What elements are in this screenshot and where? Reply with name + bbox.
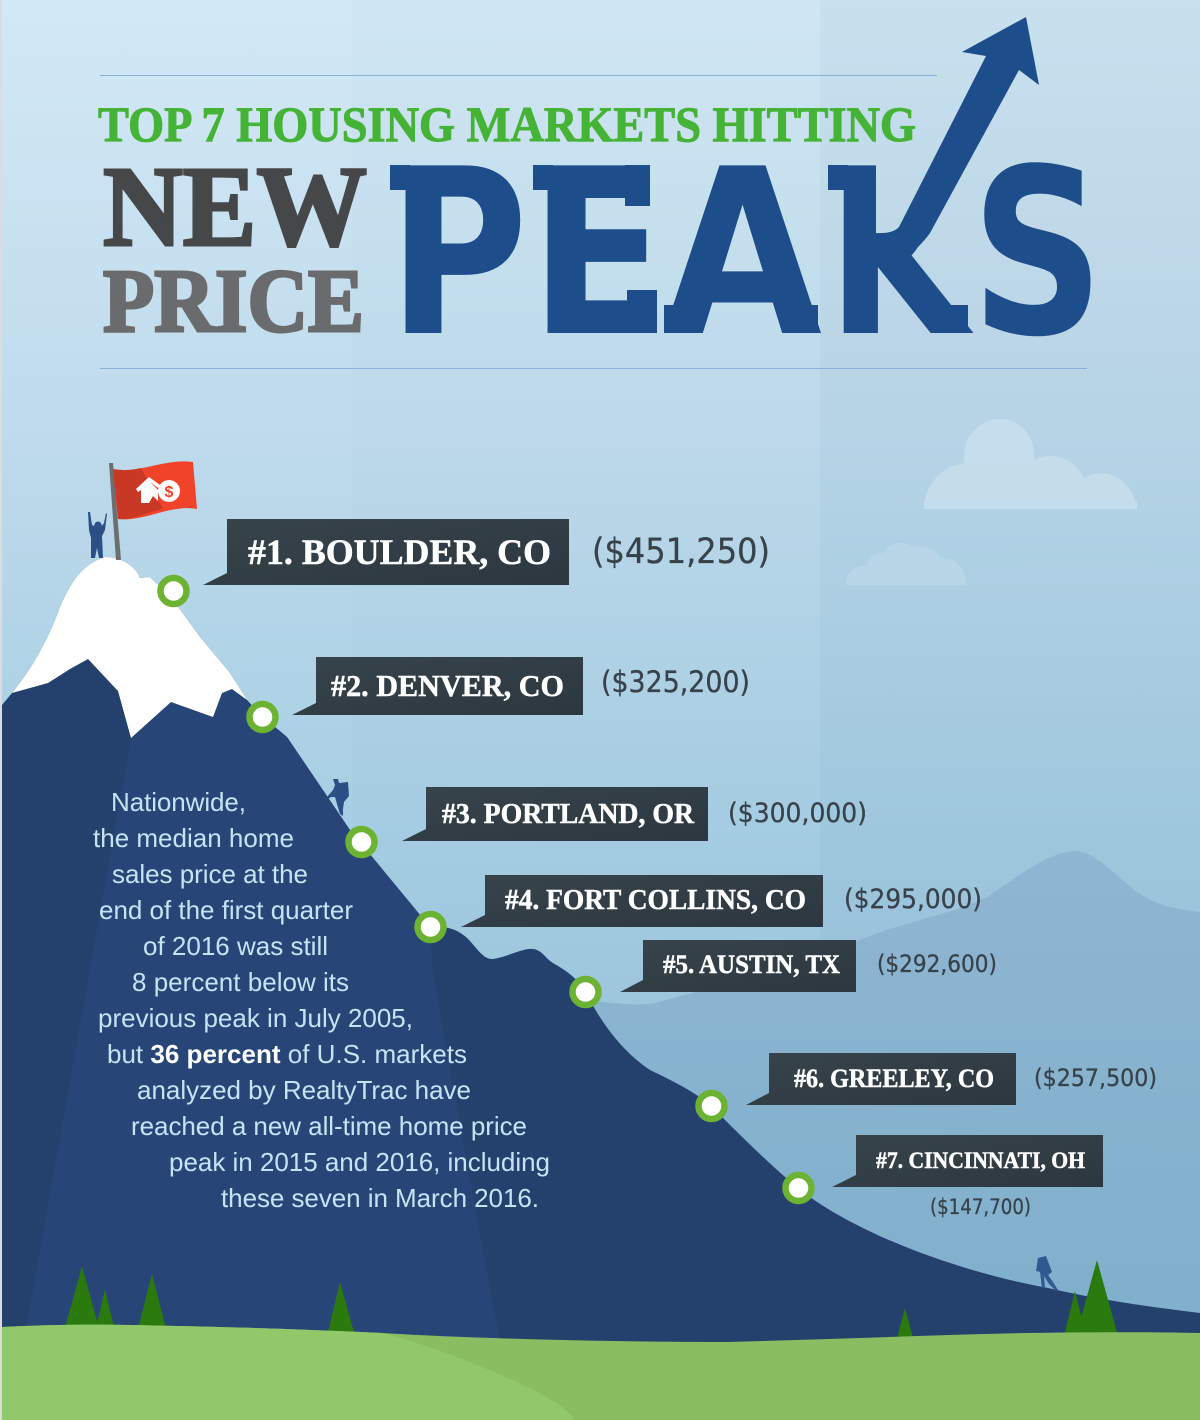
price 4: ($295,000) — [844, 884, 982, 915]
climber: summit — [88, 512, 107, 558]
flag pole — [109, 463, 121, 560]
ground: light hill — [2, 1325, 574, 1420]
title: peaks — [390, 162, 1090, 336]
body text: previous peak in July 2005, — [98, 1003, 413, 1033]
title: peaks: E — [529, 121, 667, 388]
marker 1 — [160, 578, 186, 604]
label 3: Portland: #3. PORTLAND, OR — [442, 798, 695, 830]
label 3: Portland — [402, 787, 708, 841]
title: peaks: S — [971, 121, 1104, 388]
price 6: ($257,500) — [1034, 1064, 1157, 1092]
marker 2 — [250, 704, 276, 730]
price 1: ($451,250) — [592, 532, 770, 572]
body text: Nationwide, — [111, 787, 246, 817]
body text: but 36 percent of U.S. markets — [107, 1039, 467, 1069]
label 5: Austin: #5. AUSTIN, TX — [663, 950, 840, 979]
title: new: NEW — [103, 143, 367, 270]
marker 7 — [786, 1175, 812, 1201]
body text: these seven in March 2016. — [221, 1183, 539, 1213]
label 6: Greeley: #6. GREELEY, CO — [794, 1064, 994, 1093]
icon: house — [136, 477, 160, 503]
climber: hiker — [1036, 1256, 1058, 1291]
body text: 8 percent below its — [132, 967, 349, 997]
body text: sales price at the — [112, 859, 308, 889]
flag shade — [113, 468, 163, 519]
price 2: ($325,200) — [601, 665, 750, 699]
title: top 7 housing markets hitting: TOP 7 HOUSING MARKETS HITTING — [98, 96, 916, 152]
label 4: Fort Collins — [461, 875, 823, 927]
title: peaks: P — [388, 121, 528, 388]
snow cap — [12, 557, 247, 738]
mountain facet — [24, 689, 500, 1340]
label 2: Denver — [292, 657, 583, 715]
title: peaks: K — [827, 121, 974, 388]
label 5: Austin — [620, 940, 856, 992]
marker 3 — [348, 829, 374, 855]
slab serifs on peaks — [390, 165, 968, 333]
climber: slope — [327, 779, 349, 816]
body text: reached a new all-time home price — [131, 1111, 527, 1141]
flag cloth — [113, 461, 197, 519]
body text: end of the first quarter — [99, 895, 353, 925]
body text: peak in 2015 and 2016, including — [169, 1147, 550, 1177]
marker 4 — [418, 914, 444, 940]
label 1: Boulder — [203, 519, 569, 585]
label 4: Fort Collins: #4. FORT COLLINS, CO — [505, 884, 806, 916]
label 6: Greeley — [746, 1053, 1016, 1105]
marker 5 — [572, 979, 598, 1005]
body text: analyzed by RealtyTrac have — [137, 1075, 471, 1105]
marker 6 — [698, 1093, 724, 1119]
body text — [93, 787, 550, 1213]
body text: of 2016 was still — [143, 931, 328, 961]
main mountain — [2, 557, 1200, 1350]
flag — [109, 461, 197, 560]
label 7: Cincinnati: #7. CINCINNATI, OH — [876, 1148, 1085, 1173]
trees — [64, 1260, 1118, 1342]
body text: the median home — [93, 823, 294, 853]
rule: bottom — [100, 368, 1087, 369]
ground — [2, 1325, 1200, 1420]
title: price: PRICE — [103, 252, 364, 351]
flag: $ — [165, 484, 174, 501]
price 3: ($300,000) — [728, 798, 867, 829]
label 7: Cincinnati — [832, 1135, 1103, 1187]
price 5: ($292,600) — [877, 950, 997, 978]
icon: dollar coin — [158, 480, 180, 502]
title: peaks: A — [663, 121, 822, 388]
cloud: large — [924, 419, 1137, 509]
arrow — [875, 17, 1039, 262]
rule: top — [100, 75, 937, 76]
label 2: Denver: #2. DENVER, CO — [331, 668, 564, 703]
price 7: ($147,700) — [930, 1195, 1031, 1219]
cloud: small — [846, 543, 966, 585]
distant mountain — [586, 851, 1200, 1340]
label 1: Boulder: #1. BOULDER, CO — [248, 532, 551, 572]
